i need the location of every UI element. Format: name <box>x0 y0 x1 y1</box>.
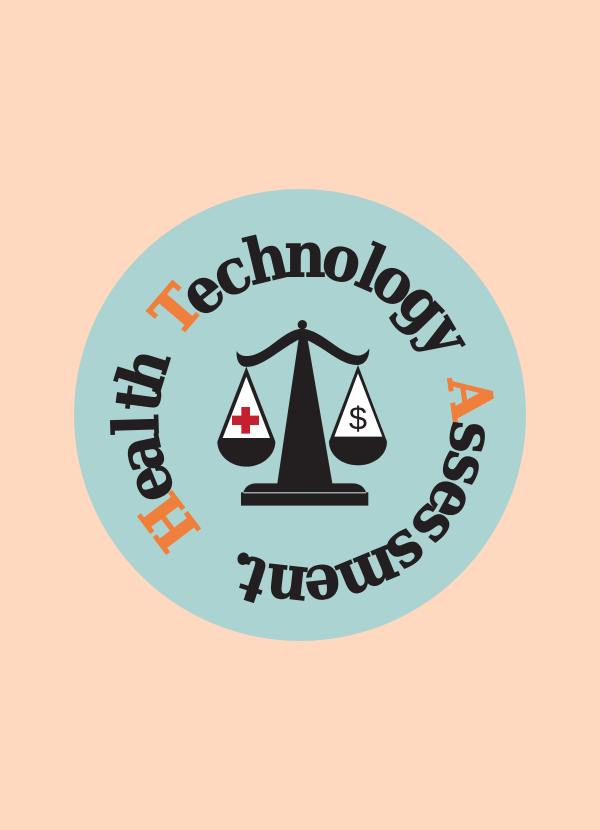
scale stand and base <box>241 320 368 506</box>
circular title: Health Technology Assessment.: n <box>262 548 311 626</box>
icon: red cross <box>232 407 259 434</box>
circular title: Health Technology Assessment.: s <box>434 418 510 458</box>
circular title: Health Technology Assessment.: s <box>396 491 473 562</box>
right pan with dollar sign <box>329 365 387 465</box>
circular title: Health Technology Assessment.: e <box>301 549 344 625</box>
circular title: Health Technology Assessment.: a <box>101 429 180 479</box>
circular title: Health Technology Assessment.: c <box>199 232 263 313</box>
circular title: Health Technology Assessment.: l <box>100 413 174 437</box>
circular title: Health Technology Assessment.: l <box>346 231 395 307</box>
circular title: Health Technology Assessment.: t <box>101 380 177 416</box>
circular title: Health Technology Assessment.: e <box>411 467 493 534</box>
icon: dollar sign: $ <box>349 399 367 436</box>
circular title: Health Technology Assessment.: o <box>359 241 431 323</box>
circular title: Health Technology Assessment.: A <box>434 371 507 425</box>
circular title: Health Technology Assessment.: s <box>373 514 443 592</box>
circular title: Health Technology Assessment.: . <box>213 536 261 611</box>
circular title: Health Technology Assessment.: e <box>109 453 191 515</box>
circular title: Health Technology Assessment. <box>100 219 510 626</box>
circular title: Health Technology Assessment.: m <box>327 530 411 620</box>
circular title: Health Technology Assessment.: h <box>238 219 295 300</box>
circular title: Health Technology Assessment.: n <box>284 219 326 292</box>
circular title: Health Technology Assessment.: e <box>165 252 239 331</box>
circular title: Health Technology Assessment.: o <box>315 220 369 300</box>
icon: balance scale <box>217 320 387 506</box>
teal circle badge <box>74 189 526 641</box>
circular title: Health Technology Assessment.: g <box>383 266 464 345</box>
circular title: Health Technology Assessment.: t <box>229 541 277 619</box>
scale beam <box>237 329 369 367</box>
base highlight <box>243 492 366 493</box>
circular title: Health Technology Assessment.: h <box>104 340 186 401</box>
circular title: Health Technology Assessment.: H <box>128 480 213 563</box>
circular title: Health Technology Assessment.: T <box>138 273 216 348</box>
circular title: Health Technology Assessment.: y <box>406 301 487 370</box>
circular title: Health Technology Assessment.: s <box>426 444 505 496</box>
left pan with red cross <box>217 367 275 467</box>
